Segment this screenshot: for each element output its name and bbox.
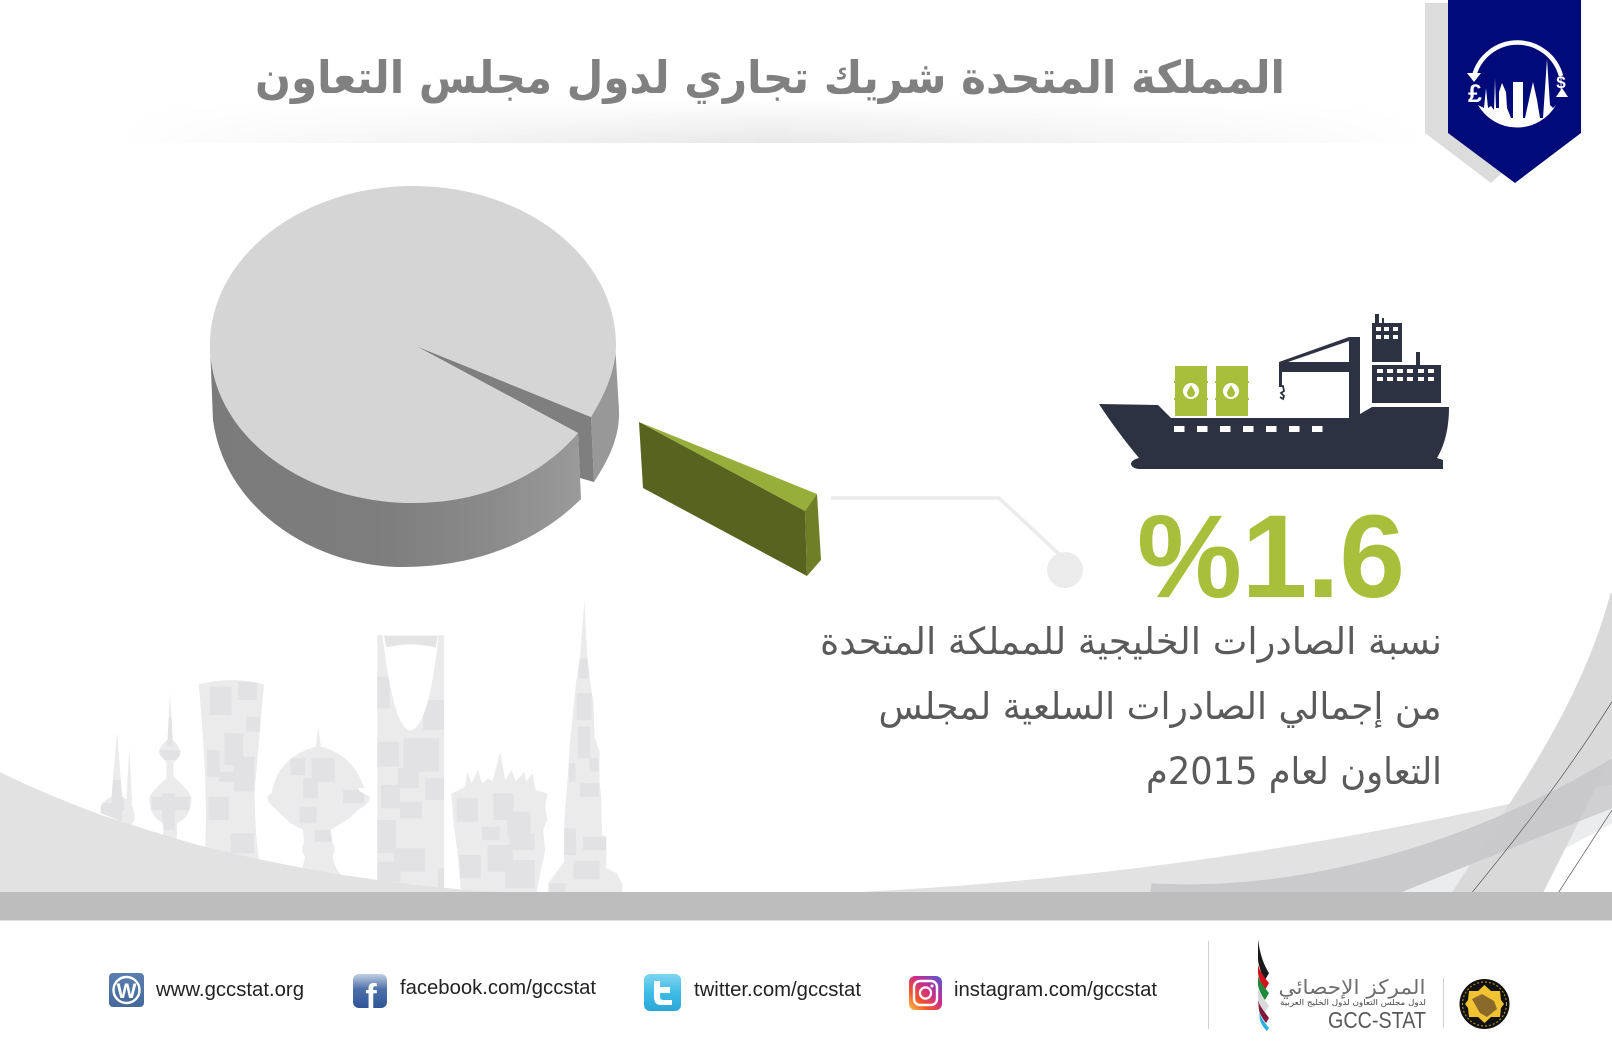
description text — [820, 620, 1442, 793]
big statistic: %1.6 — [1137, 491, 1405, 623]
detached green slice — [639, 422, 821, 576]
logo arabic subtitle: لدول مجلس التعاون لدول الخليج العربية — [1280, 998, 1426, 1007]
left background swoosh — [0, 772, 497, 892]
footer link: website: www.gccstat.org — [155, 979, 304, 1001]
logo arabic name: المركز الإحصائي — [1278, 975, 1426, 1000]
icon: wordpress — [109, 973, 144, 1007]
GCC-STAT logo — [1258, 939, 1426, 1033]
icon: facebook — [353, 974, 387, 1016]
icon: twitter — [644, 974, 681, 1011]
icon: facebook: f — [365, 978, 377, 1016]
oil barrel left — [1174, 366, 1208, 416]
footer link: instagram: instagram.com/gccstat — [954, 979, 1157, 1001]
ship tower — [1372, 314, 1402, 362]
right background swooshes — [860, 593, 1612, 892]
logo ribbon — [1258, 939, 1269, 1031]
footer link: website — [109, 973, 304, 1007]
logo divider — [1443, 978, 1444, 1028]
pie top face — [210, 186, 616, 503]
footer link: twitter: twitter.com/gccstat — [694, 979, 861, 1001]
description text: نسبة الصادرات الخليجية للمملكة المتحدة — [820, 620, 1442, 663]
footer link: instagram — [909, 976, 1157, 1010]
ship hull and crane — [1099, 337, 1449, 469]
footer divider — [1208, 941, 1209, 1029]
title haze band — [354, 115, 1186, 143]
crane hook — [1279, 386, 1284, 399]
description text: التعاون لعام 2015م — [1146, 750, 1442, 793]
banner badge — [1425, 0, 1581, 183]
footer bar — [0, 892, 1612, 921]
icon: cargo ship with oil barrels — [1099, 314, 1449, 469]
icon: skyline with currency ring: $ — [1556, 73, 1566, 92]
footer link: twitter — [644, 974, 861, 1011]
logo latin name: GCC-STAT — [1328, 1007, 1426, 1033]
skyline silhouette — [84, 590, 631, 893]
footer link: facebook — [353, 974, 596, 1016]
oil barrel right — [1215, 366, 1249, 416]
ship lower cabin — [1372, 352, 1441, 403]
icon: skyline with currency ring: £ — [1468, 80, 1482, 108]
pie side wall: main body — [210, 345, 581, 567]
icon: skyline with currency ring — [1467, 43, 1568, 128]
icon: instagram — [909, 976, 942, 1010]
footer link: facebook: facebook.com/gccstat — [400, 977, 596, 999]
pie side wall: wedge inner face — [416, 346, 594, 482]
callout connector — [831, 498, 1083, 588]
description text: من إجمالي الصادرات السلعية لمجلس — [878, 685, 1442, 728]
title: المملكة المتحدة شريك تجاري لدول مجلس التعاون — [255, 51, 1285, 104]
pie chart: 3D grey pie with detached slice — [210, 186, 619, 567]
GCC seal — [1460, 979, 1510, 1029]
icon: wordpress: W — [117, 980, 137, 1003]
pie side wall: right slab — [591, 343, 619, 482]
